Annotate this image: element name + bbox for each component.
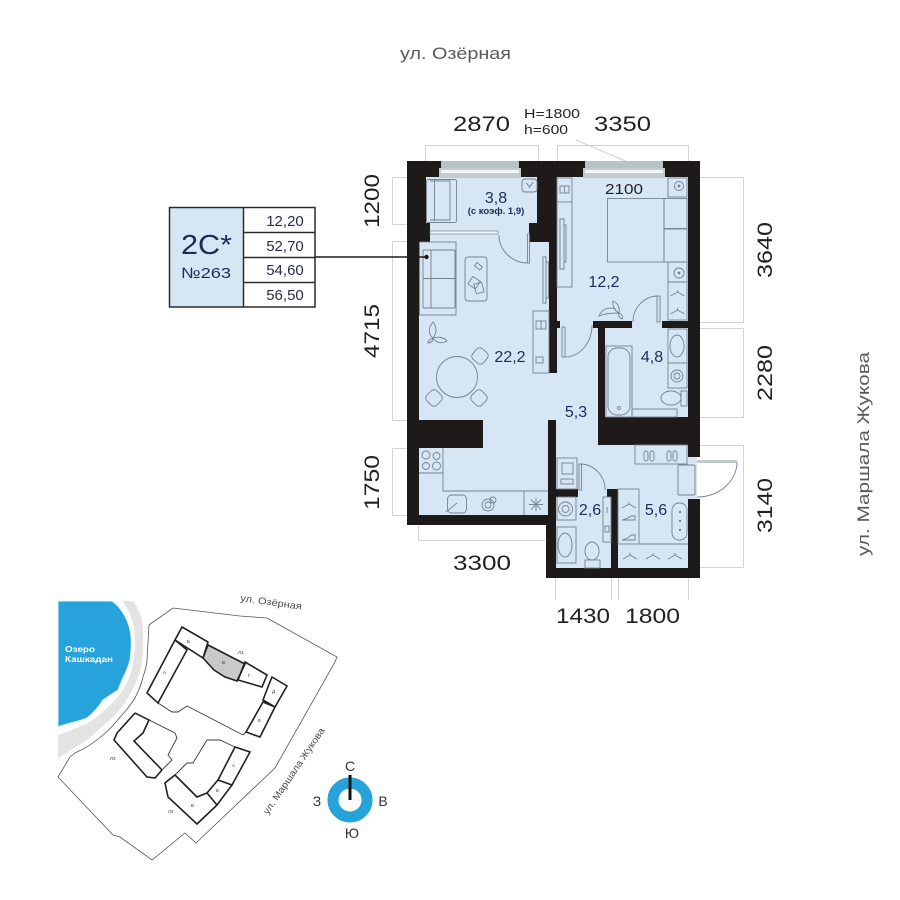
dimension numbers: 2870 [453,113,510,136]
site boundary [58,608,337,860]
street label: Marshala Zhukova: ул. Маршала Жукова [854,351,873,556]
WC door [579,464,605,490]
apartment info table: 54,60 [266,262,304,279]
building L1: Г [248,673,251,678]
sofa [420,242,456,315]
washing unit in hall [557,458,577,489]
lake [58,601,131,727]
balcony door [499,234,530,263]
apartment info table: 2С* [181,229,232,260]
dining table and chairs [424,346,490,408]
room areas: 5,6 [645,502,667,519]
window sill heights [524,106,580,137]
dimension numbers: 3640 [754,222,777,278]
room areas: 2,6 [579,502,601,519]
site plan [58,593,337,860]
apartment floor fill [419,170,697,570]
building L2 [165,740,250,824]
building L1: Д [272,689,275,694]
apartment info table: №263 [181,265,231,282]
apartment info table [170,208,315,307]
kitchen [419,448,548,515]
dressing room fixtures [618,489,688,559]
compass: С [345,758,355,774]
windows [439,161,665,178]
dimension numbers [361,113,777,628]
lake label: Кашкадан [65,654,113,664]
room areas: 12,2 [588,274,620,291]
dimension numbers: 1750 [361,455,384,510]
bedroom door [633,296,660,322]
room areas: 22,2 [494,349,526,366]
room areas: 5,3 [565,404,587,421]
dimension lines [392,140,744,600]
balcony furniture and partition [426,179,537,234]
dimension numbers: 1800 [625,605,680,628]
bathroom fixtures [606,329,687,417]
apartment info table: 52,70 [266,238,304,255]
room areas: 2100 [605,181,643,198]
compass: В [378,793,388,809]
window sill heights: H=1800 [524,106,580,121]
building L1: Б [187,639,190,644]
lake label [65,644,113,664]
lake label: Озеро [65,644,95,654]
bedroom wardrobe and TV [557,178,572,287]
compass: З [313,793,321,809]
bedroom plant [599,301,623,319]
compass [313,758,388,841]
walls [407,161,700,578]
entry bench [678,465,695,495]
room areas: 4,8 [641,349,663,366]
dimension numbers: 3350 [594,113,651,136]
building L1: Е [258,718,261,723]
building L3 [110,713,177,778]
dimension numbers: 2280 [754,345,777,401]
shore band [58,601,143,758]
room areas [468,181,667,519]
TV and living room cabinet [533,257,549,373]
beach strip [58,601,135,735]
compass: Ю [345,825,359,841]
building L1 [147,627,287,737]
building L2: В [191,803,194,808]
building L3: Л3 [110,756,116,761]
plant [428,322,447,343]
dimension numbers: 1200 [361,174,384,228]
dimension numbers: 3140 [754,478,777,533]
bed [608,178,687,282]
floor plan [407,161,737,578]
building L1: Л1 [238,650,244,655]
entrance door [697,460,737,497]
site street label Zhukova: ул. Маршала Жукова [261,725,328,817]
window sill heights: h=600 [524,122,568,137]
building L1: А [163,670,166,675]
dimension numbers: 1430 [556,605,610,628]
apartment info table: 56,50 [266,287,304,304]
building L2: А [232,763,235,768]
dimension numbers: 3300 [453,552,511,575]
coffee table rug [465,257,487,301]
WC fixtures [557,497,611,568]
bedroom closet hangers [668,282,687,320]
site street label Ozyornaya: ул. Озёрная [240,593,303,613]
building L2: Л2 [168,809,174,814]
street label: Ozyornaya: ул. Озёрная [400,44,511,63]
room areas: 3,8 [485,190,507,207]
leader line from table to living room [315,255,429,259]
hall door [562,325,592,357]
dimension numbers: 4715 [361,304,384,358]
building L1: В [222,660,225,665]
entry shoe shelf [635,445,687,464]
room areas: (с коэф. 1,9) [468,206,524,217]
apartment info table: 12,20 [266,213,304,230]
building L2: Б [216,788,219,793]
